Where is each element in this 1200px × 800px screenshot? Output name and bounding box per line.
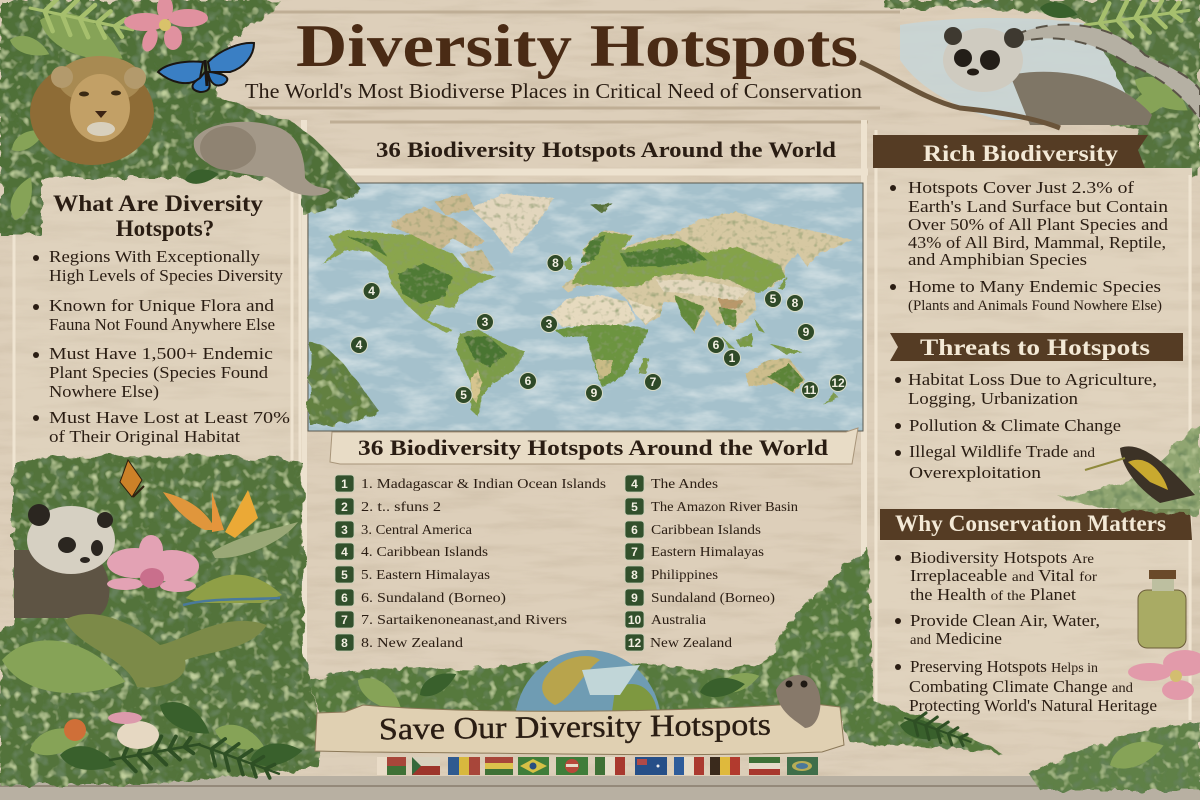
legend: hotspot list: 9 <box>631 591 638 605</box>
illustration: lizards <box>65 575 282 688</box>
marker numbers: 8 <box>792 296 799 310</box>
section: why conservation matters: Biodiversity Hotspots Are <box>910 548 1094 567</box>
section: rich biodiversity: Hotspots Cover Just 2.3% of <box>908 178 1134 197</box>
icon: blue butterfly <box>158 43 254 92</box>
continents <box>322 193 853 417</box>
legend: hotspot list: Eastern Himalayas <box>651 545 764 560</box>
section: rich biodiversity: and Amphibian Species <box>908 250 1087 269</box>
legend: hotspot list: 8. New Zealand <box>361 636 463 651</box>
section: threats to hotspots: Pollution & Climate Change <box>909 416 1121 435</box>
section: why conservation matters: and Medicine <box>910 629 1002 648</box>
marker numbers: 12 <box>831 376 845 390</box>
illustration: elephant <box>194 122 330 196</box>
illustration: top-right lemur <box>860 25 1200 128</box>
section: rich biodiversity: Home to Many Endemic Species <box>908 277 1161 296</box>
flag 6 <box>556 757 588 775</box>
legend: hotspot list: 12 <box>628 636 641 650</box>
panel heading: What Are Diversity <box>53 191 264 216</box>
illustration: globe <box>516 650 660 711</box>
panel heading <box>53 191 264 241</box>
bullet list: Fauna Not Found Anywhere Else <box>49 315 275 334</box>
foliage: top-right corner <box>885 0 1200 180</box>
flag 8 <box>635 757 667 775</box>
legend: hotspot list: 7 <box>631 545 638 559</box>
panel heading: Hotspots? <box>116 216 214 241</box>
marker numbers: 7 <box>650 375 657 389</box>
foliage: bottom-right corner <box>1030 722 1200 790</box>
section: why conservation matters: the Health of the Planet <box>910 585 1076 604</box>
legend: hotspot list: 1. Madagascar & Indian Ocean Islands <box>361 477 606 492</box>
section: why conservation matters: Combating Climate Change and <box>909 677 1133 696</box>
illustration: pink flower <box>124 0 208 54</box>
legend: hotspot list: 4 <box>341 545 348 559</box>
legend: hotspot list: 8 <box>341 636 348 650</box>
section: threats to hotspots: Habitat Loss Due to Agriculture, <box>908 370 1157 389</box>
marker numbers: 1 <box>729 351 736 365</box>
legend: hotspot list: The Andes <box>651 477 718 492</box>
panel: right column <box>873 130 1192 730</box>
legend: hotspot list: The Amazon River Basin <box>651 500 798 515</box>
legend: hotspot list: Caribbean Islands <box>651 523 761 538</box>
legend: hotspot list: Australia <box>651 613 707 628</box>
illustration: bird on branch <box>1085 446 1195 503</box>
bullet list: Nowhere Else) <box>49 382 159 401</box>
illustration: lion <box>30 56 154 165</box>
legend: hotspot list: 2 <box>341 500 348 514</box>
section: why conservation matters: Preserving Hotspots Helps in <box>910 657 1098 676</box>
flag 3 <box>448 757 480 775</box>
world map <box>308 183 863 431</box>
bullet list: Regions With Exceptionally <box>49 247 261 266</box>
legend: hotspot list: 6 <box>341 591 348 605</box>
map markers <box>350 254 846 404</box>
flag 1 <box>377 757 406 775</box>
flag 9 <box>674 757 704 775</box>
bullet list: Plant Species (Species Found <box>49 363 269 382</box>
icon: orange butterfly <box>120 460 144 497</box>
section: threats to hotspots: Threats to Hotspots <box>920 335 1150 360</box>
flag 12 <box>787 757 818 775</box>
legend: hotspot list: Sundaland (Borneo) <box>651 591 775 606</box>
pale water behind the lemur <box>900 18 1135 120</box>
bullet list: Must Have 1,500+ Endemic <box>49 344 274 363</box>
bullet list: Known for Unique Flora and <box>49 296 275 315</box>
flag 2 <box>412 757 440 775</box>
section: rich biodiversity: 43% of All Bird, Mammal, Reptile, <box>908 233 1166 252</box>
marker numbers: 3 <box>546 317 553 331</box>
flag 7 <box>595 757 625 775</box>
section: why conservation matters: Provide Clean Air, Water, <box>910 611 1100 630</box>
section: threats to hotspots: Logging, Urbanization <box>908 389 1079 408</box>
legend: hotspot list: 6. Sundaland (Borneo) <box>361 591 506 606</box>
legend: hotspot list: 5. Eastern Himalayas <box>361 568 490 583</box>
section: threats to hotspots: Overexploitation <box>909 463 1042 482</box>
legend: hotspot list: New Zealand <box>650 636 732 651</box>
legend: hotspot list: 4. Caribbean Islands <box>361 545 488 560</box>
legend: hotspot list: 7 <box>341 613 348 627</box>
legend: hotspot list: 10 <box>628 613 641 627</box>
illustration: panda <box>14 504 115 618</box>
flag 10 <box>710 757 740 775</box>
marker numbers: 9 <box>591 386 598 400</box>
legend banner <box>330 428 858 464</box>
section: rich biodiversity: (Plants and Animals Found Nowhere Else) <box>908 298 1162 314</box>
flag 4 <box>485 757 513 775</box>
foliage: bottom-left <box>0 456 319 785</box>
section: rich biodiversity <box>873 135 1169 314</box>
legend: hotspot list: 5 <box>341 568 348 582</box>
foliage: bottom-centre garland <box>310 548 1000 752</box>
illustration: pink orchid <box>107 535 199 592</box>
legend: hotspot list: 7. Sartaikenoneanast,and Rivers <box>361 613 567 628</box>
section: rich biodiversity: Earth's Land Surface but Contain <box>908 197 1169 216</box>
subtitle: The World's Most Biodiverse Places in Critical Need of Conservation <box>245 79 863 103</box>
legend: hotspot list: 2. t.. sfuns 2 <box>361 500 441 515</box>
bullet list <box>33 247 290 446</box>
section: why conservation matters: Why Conservation Matters <box>895 511 1166 536</box>
flag 5 <box>518 757 549 775</box>
marker numbers: 6 <box>525 374 532 388</box>
panel: what are diversity hotspots <box>14 176 302 470</box>
foliage: bird branch <box>1060 425 1200 515</box>
illustration: bird of paradise <box>163 490 298 558</box>
legend: hotspot list <box>335 475 798 651</box>
marker numbers: 3 <box>482 315 489 329</box>
marker numbers: 6 <box>713 338 720 352</box>
bullet list: of Their Original Habitat <box>49 427 240 446</box>
bullet list: High Levels of Species Diversity <box>49 266 284 285</box>
legend: hotspot list: 3 <box>341 523 348 537</box>
legend banner: 36 Biodiversity Hotspots Around the World <box>358 435 828 460</box>
legend: hotspot list: 4 <box>631 477 638 491</box>
title: Diversity Hotspots <box>296 13 858 79</box>
section: why conservation matters <box>880 509 1192 715</box>
legend: hotspot list: 1 <box>341 477 348 491</box>
legend: hotspot list: Philippines <box>651 568 718 583</box>
section: threats to hotspots: Illegal Wildlife Trade and <box>909 442 1095 461</box>
illustration: oil bottle <box>1138 570 1186 648</box>
legend: hotspot list: 5 <box>631 500 638 514</box>
marker numbers <box>356 256 845 402</box>
illustration: small lemur <box>776 675 820 728</box>
flag 11 <box>749 757 780 775</box>
marker numbers: 4 <box>356 338 363 352</box>
illustration: bottom-left flowers <box>64 712 159 749</box>
marker numbers: 11 <box>804 383 817 397</box>
foliage: top-left corner <box>0 0 360 235</box>
marker numbers: 5 <box>770 292 777 306</box>
legend: hotspot list: 8 <box>631 568 638 582</box>
section: rich biodiversity: Over 50% of All Plant Species and <box>908 215 1169 234</box>
section: why conservation matters: Irreplaceable and Vital for <box>910 566 1097 585</box>
marker numbers: 5 <box>460 388 467 402</box>
footer ribbon: Save Our Diversity Hotspots <box>379 707 771 746</box>
flags row <box>377 757 818 775</box>
footer ribbon <box>315 703 844 755</box>
legend: hotspot list: 3. Central America <box>361 523 473 538</box>
illustration: pink flower right <box>1128 650 1200 700</box>
section: rich biodiversity: Rich Biodiversity <box>923 141 1119 166</box>
panel: centre map frame <box>304 120 868 670</box>
marker numbers: 8 <box>552 256 559 270</box>
marker numbers: 4 <box>368 284 375 298</box>
section: why conservation matters: Protecting World's Natural Heritage <box>909 696 1157 715</box>
map heading: 36 Biodiversity Hotspots Around the World <box>376 137 836 162</box>
legend: hotspot list: 6 <box>631 523 638 537</box>
section: threats to hotspots <box>890 333 1183 482</box>
bullet list: Must Have Lost at Least 70% <box>49 408 290 427</box>
marker numbers: 9 <box>803 325 810 339</box>
foliage: map lower-left corner <box>309 342 378 424</box>
